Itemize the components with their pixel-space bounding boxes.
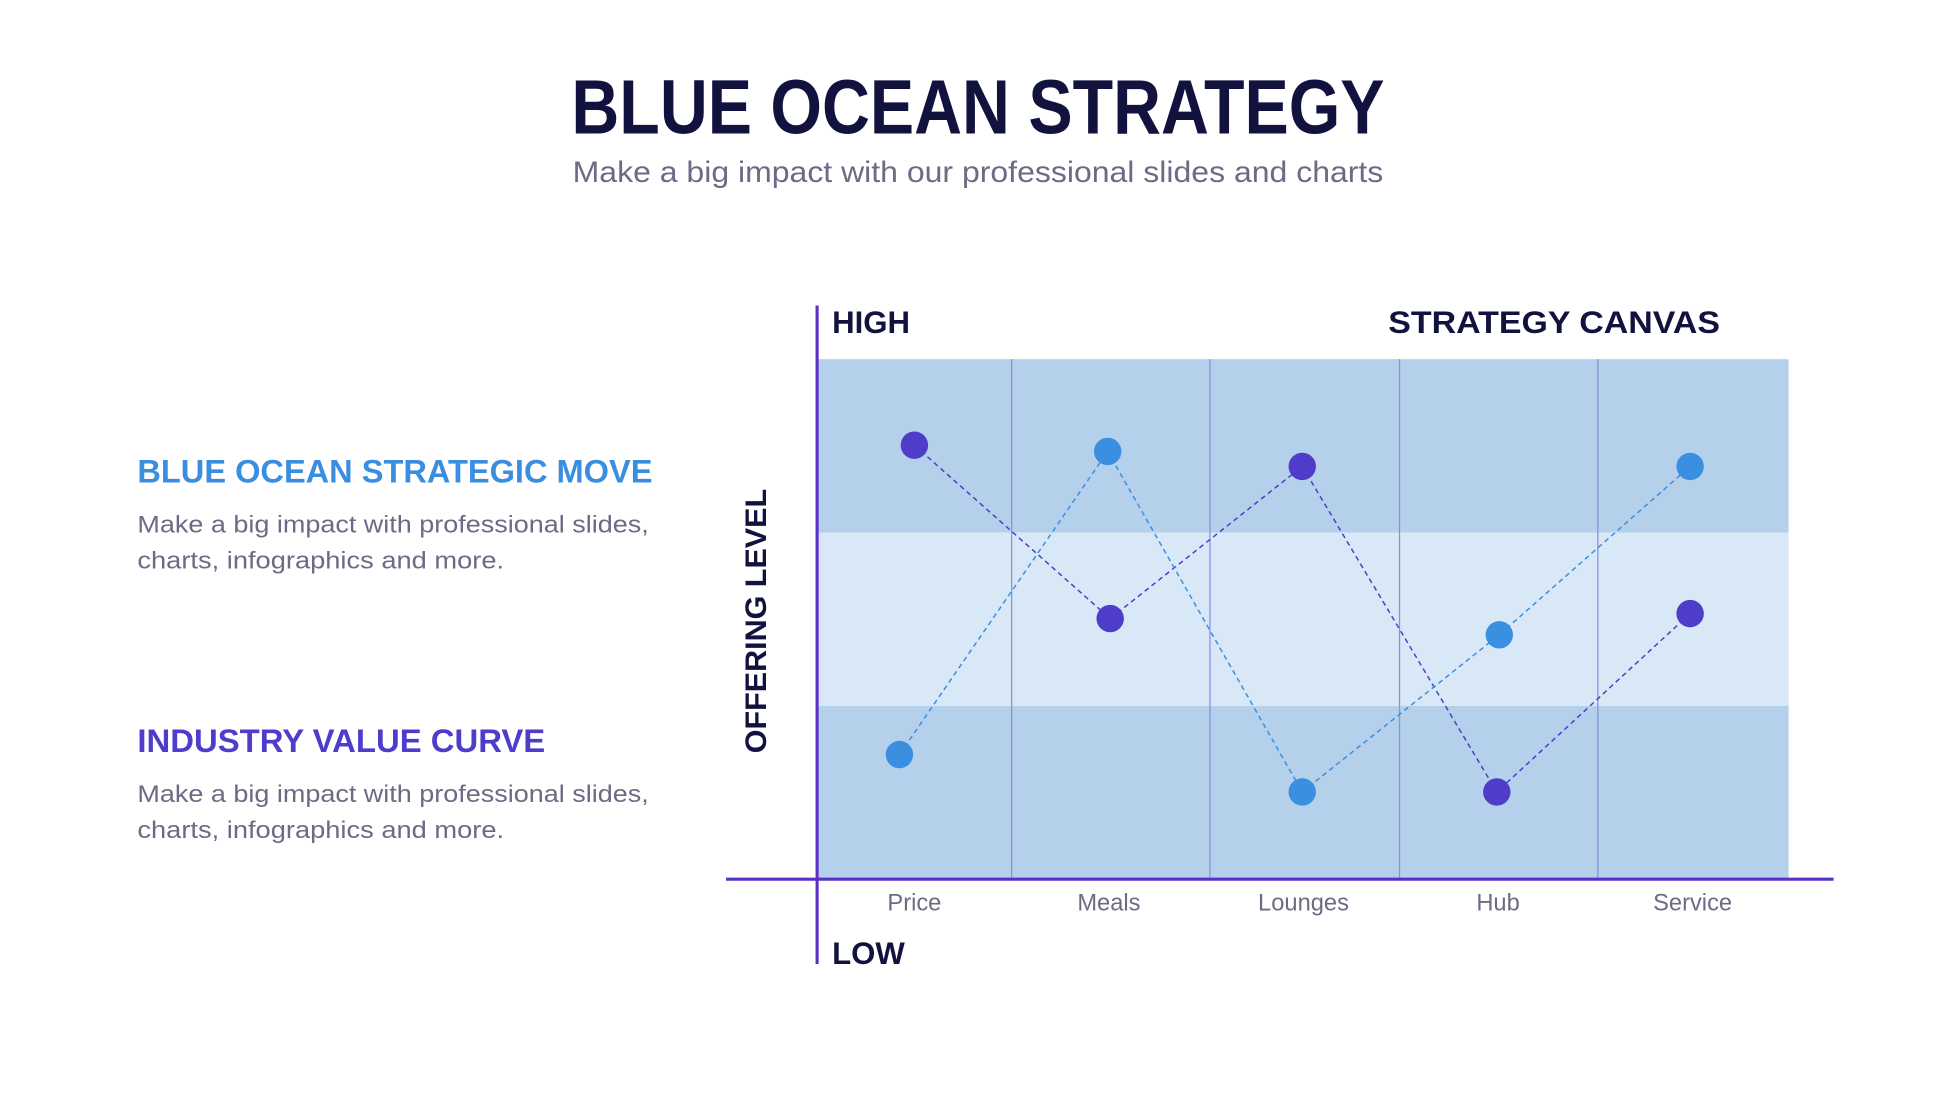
title: BLUE OCEAN STRATEGY <box>571 64 1385 150</box>
category labels: Lounges <box>1258 890 1349 916</box>
category labels <box>887 890 1732 916</box>
legend: industry value curve: INDUSTRY VALUE CURVE <box>137 723 545 759</box>
subtitle: Make a big impact with our professional slides and charts <box>573 156 1383 189</box>
category labels: Price <box>887 890 941 916</box>
legend: blue ocean strategic move: charts, infographics and more. <box>137 549 504 575</box>
category labels: Hub <box>1476 890 1520 916</box>
legend: blue ocean strategic move: BLUE OCEAN STRATEGIC MOVE <box>137 454 652 490</box>
blue ocean strategic move line <box>886 438 1704 806</box>
legend: industry value curve: charts, infographics and more. <box>137 818 504 844</box>
legend: industry value curve <box>137 723 649 844</box>
legend: blue ocean strategic move <box>137 454 652 575</box>
legend: industry value curve: Make a big impact with professional slides, <box>137 782 649 808</box>
axes <box>726 306 1834 964</box>
legend: blue ocean strategic move: Make a big impact with professional slides, <box>137 513 649 539</box>
category labels: Service <box>1653 890 1732 916</box>
label LOW: LOW <box>832 936 905 971</box>
label HIGH: HIGH <box>832 305 910 340</box>
label STRATEGY CANVAS: STRATEGY CANVAS <box>1388 305 1720 340</box>
y axis label: OFFERING LEVEL <box>740 489 773 753</box>
chart: strategy canvas <box>726 305 1834 971</box>
industry value curve line <box>901 432 1704 806</box>
category labels: Meals <box>1077 890 1141 916</box>
